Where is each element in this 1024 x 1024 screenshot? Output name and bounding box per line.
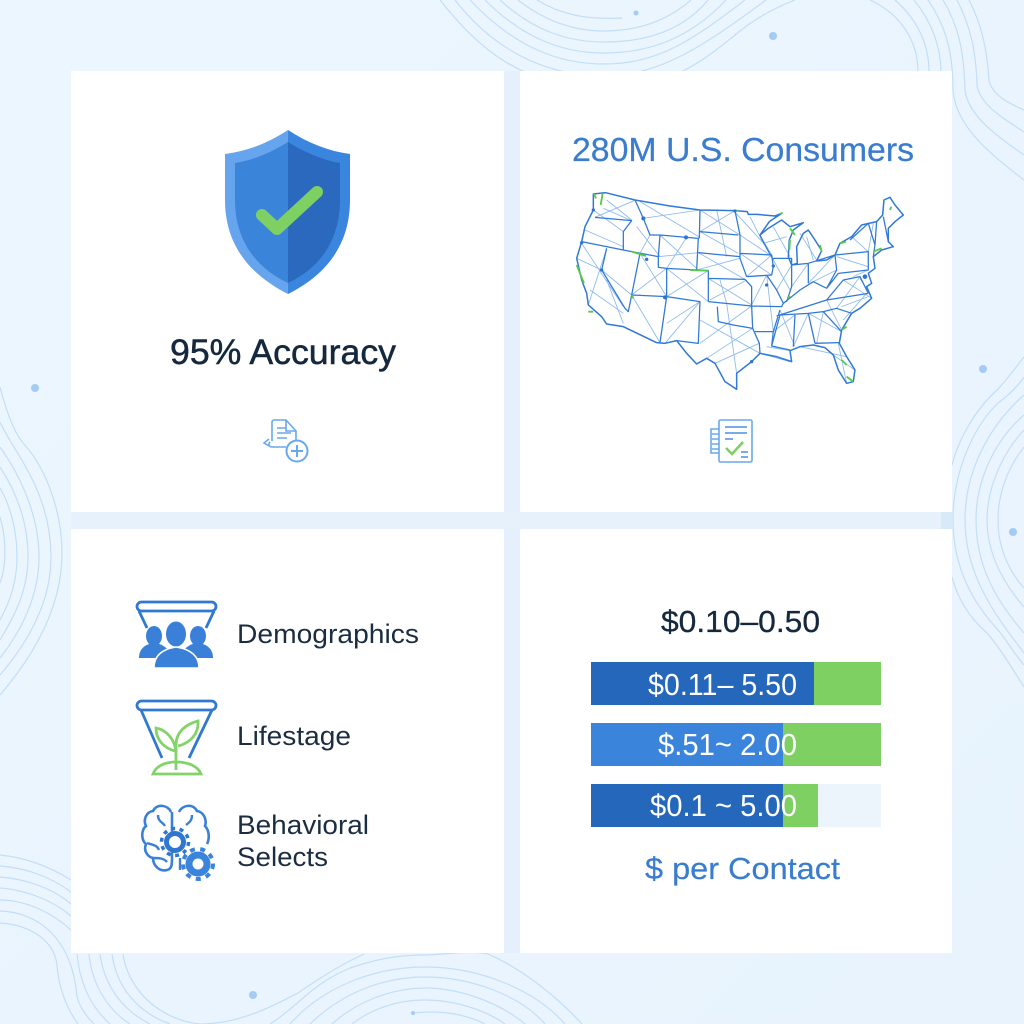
heading: 95% Accuracy: 95% Accuracy bbox=[170, 333, 397, 372]
icon: plant in funnel bbox=[137, 701, 216, 774]
icon: brain with gears bbox=[142, 806, 213, 879]
icon: people in funnel bbox=[137, 602, 216, 668]
label: Behavioral Selects bbox=[237, 810, 369, 872]
label: Behavioral Selects: Selects bbox=[237, 842, 328, 872]
label: Behavioral Selects: Behavioral bbox=[237, 810, 369, 840]
panel: national coverage bbox=[520, 71, 952, 512]
bar: tier 2: $.51~ 2.00 bbox=[658, 727, 797, 762]
bar: tier 3 bbox=[591, 784, 881, 827]
icon: checklist document bbox=[711, 420, 752, 462]
bar: tier 2 bbox=[591, 723, 881, 766]
label: Demographics: Demographics bbox=[237, 619, 419, 649]
icon: document with plus bbox=[264, 420, 308, 462]
bar: tier 3: $0.1 ~ 5.00 bbox=[650, 788, 797, 823]
icon: shield with check mark bbox=[225, 130, 350, 294]
heading: 280M U.S. Consumers: 280M U.S. Consumers bbox=[572, 131, 914, 168]
panel: data selects bbox=[71, 529, 504, 953]
bar: tier 1: $0.11– 5.50 bbox=[648, 667, 797, 702]
panel: pricing bbox=[520, 529, 952, 953]
caption: $ per Contact: $ per Contact bbox=[645, 851, 840, 886]
label: Lifestage: Lifestage bbox=[237, 721, 351, 751]
map: United States network bbox=[577, 193, 903, 389]
bar: tier 1 bbox=[591, 662, 881, 705]
panel: accuracy bbox=[71, 71, 504, 512]
heading: price range: $0.10–0.50 bbox=[661, 604, 820, 639]
